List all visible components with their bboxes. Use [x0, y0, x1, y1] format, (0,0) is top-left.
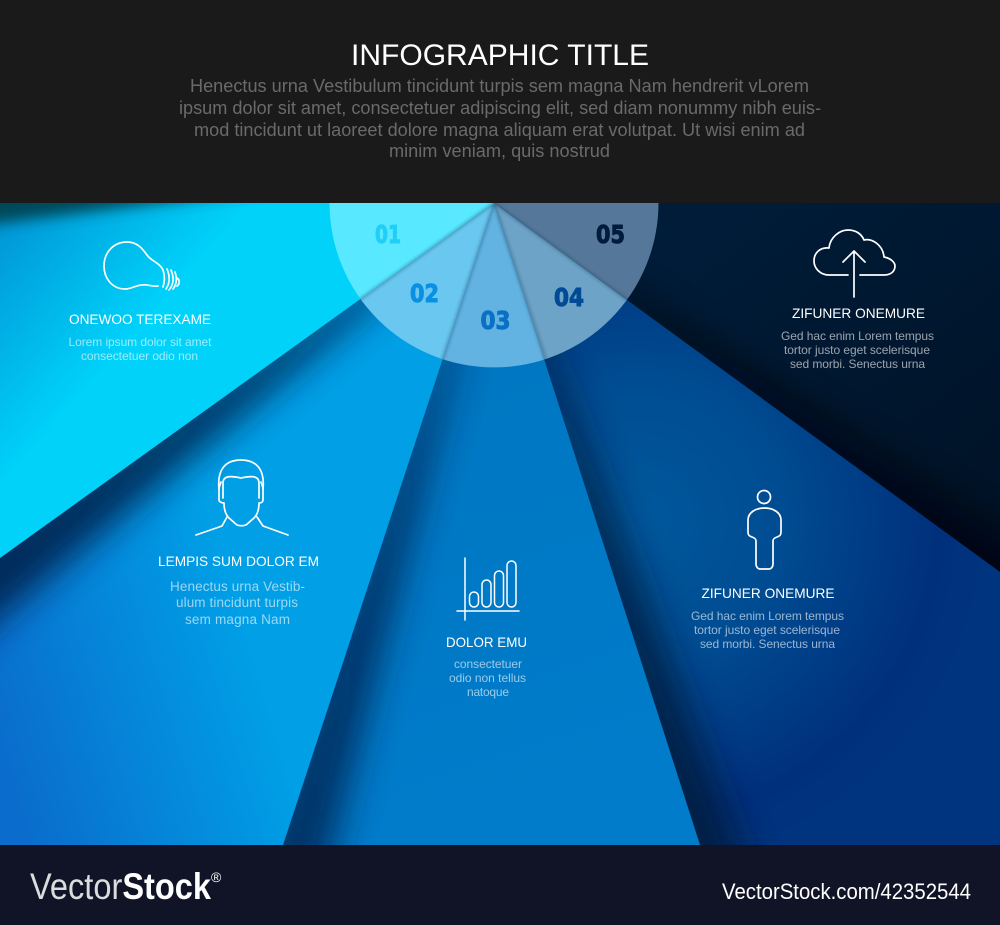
- icon: person: [748, 490, 781, 569]
- panel: segment 01: [0, 185, 494, 558]
- text block: zifuner lower: [691, 585, 844, 651]
- text block: dolor emu: consectetuer: [454, 657, 522, 671]
- number 04: 04: [554, 283, 584, 312]
- title: INFOGRAPHIC TITLE: [351, 39, 649, 72]
- text block: lempis: ulum tincidunt turpis: [176, 595, 298, 610]
- intro paragraph: Henectus urna Vestibulum tincidunt turpis sem magna Nam hendrerit vLorem: [190, 76, 809, 96]
- text block: onewoo: ONEWOO TEREXAME: [69, 311, 211, 327]
- intro paragraph: ipsum dolor sit amet, consectetuer adipiscing elit, sed diam nonummy nibh euis-: [179, 98, 821, 118]
- text block: zifuner lower: Ged hac enim Lorem tempus: [691, 609, 844, 623]
- text block: zifuner upper: [781, 305, 934, 371]
- intro paragraph: minim veniam, quis nostrud: [389, 141, 610, 161]
- panel: segment 02: [0, 203, 494, 845]
- panel: segment 03: [283, 204, 700, 845]
- text block: dolor emu: odio non tellus: [449, 671, 526, 685]
- footer bar: [0, 845, 1000, 925]
- panel: segment 04: [494, 203, 1000, 900]
- number 01: 01: [375, 220, 401, 249]
- number 02: 02: [410, 279, 439, 308]
- text block: zifuner upper: sed morbi. Senectus urna: [790, 357, 925, 371]
- text block: lempis: LEMPIS SUM DOLOR EM: [158, 553, 319, 569]
- text block: lempis: sem magna Nam: [185, 612, 290, 627]
- translucent circle hub: [330, 203, 658, 368]
- icon: light bulb: [104, 242, 179, 290]
- VectorStock logo: VectorStock: [30, 866, 211, 907]
- number 05: 05: [596, 220, 625, 249]
- icon: head and shoulders: [196, 460, 288, 535]
- text block: onewoo: consectetuer odio non: [81, 349, 198, 363]
- panel: segment 05: [627, 203, 1000, 572]
- text block: onewoo: [68, 311, 212, 363]
- text block: dolor emu: [446, 634, 527, 699]
- text block: zifuner upper: ZIFUNER ONEMURE: [792, 305, 925, 321]
- text block: zifuner lower: sed morbi. Senectus urna: [700, 637, 835, 651]
- registered mark: ®: [211, 869, 222, 885]
- intro paragraph: [179, 76, 821, 161]
- text block: zifuner upper: tortor justo eget scelerisque: [784, 343, 930, 357]
- text block: onewoo: Lorem ipsum dolor sit amet: [68, 335, 212, 349]
- text block: zifuner lower: tortor justo eget scelerisque: [694, 623, 840, 637]
- text block: lempis: Henectus urna Vestib-: [170, 579, 305, 594]
- text block: lempis: [158, 553, 319, 627]
- image id: VectorStock.com/42352544: [722, 879, 971, 904]
- text block: zifuner lower: ZIFUNER ONEMURE: [702, 585, 834, 601]
- text block: dolor emu: natoque: [467, 685, 509, 699]
- text block: dolor emu: DOLOR EMU: [446, 634, 527, 650]
- icon: cloud upload: [814, 230, 895, 297]
- intro paragraph: mod tincidunt ut laoreet dolore magna aliquam erat volutpat. Ut wisi enim ad: [194, 120, 805, 140]
- header panel: [0, 0, 1000, 203]
- number 03: 03: [480, 306, 510, 335]
- icon: bar chart: [457, 558, 519, 620]
- text block: zifuner upper: Ged hac enim Lorem tempus: [781, 329, 934, 343]
